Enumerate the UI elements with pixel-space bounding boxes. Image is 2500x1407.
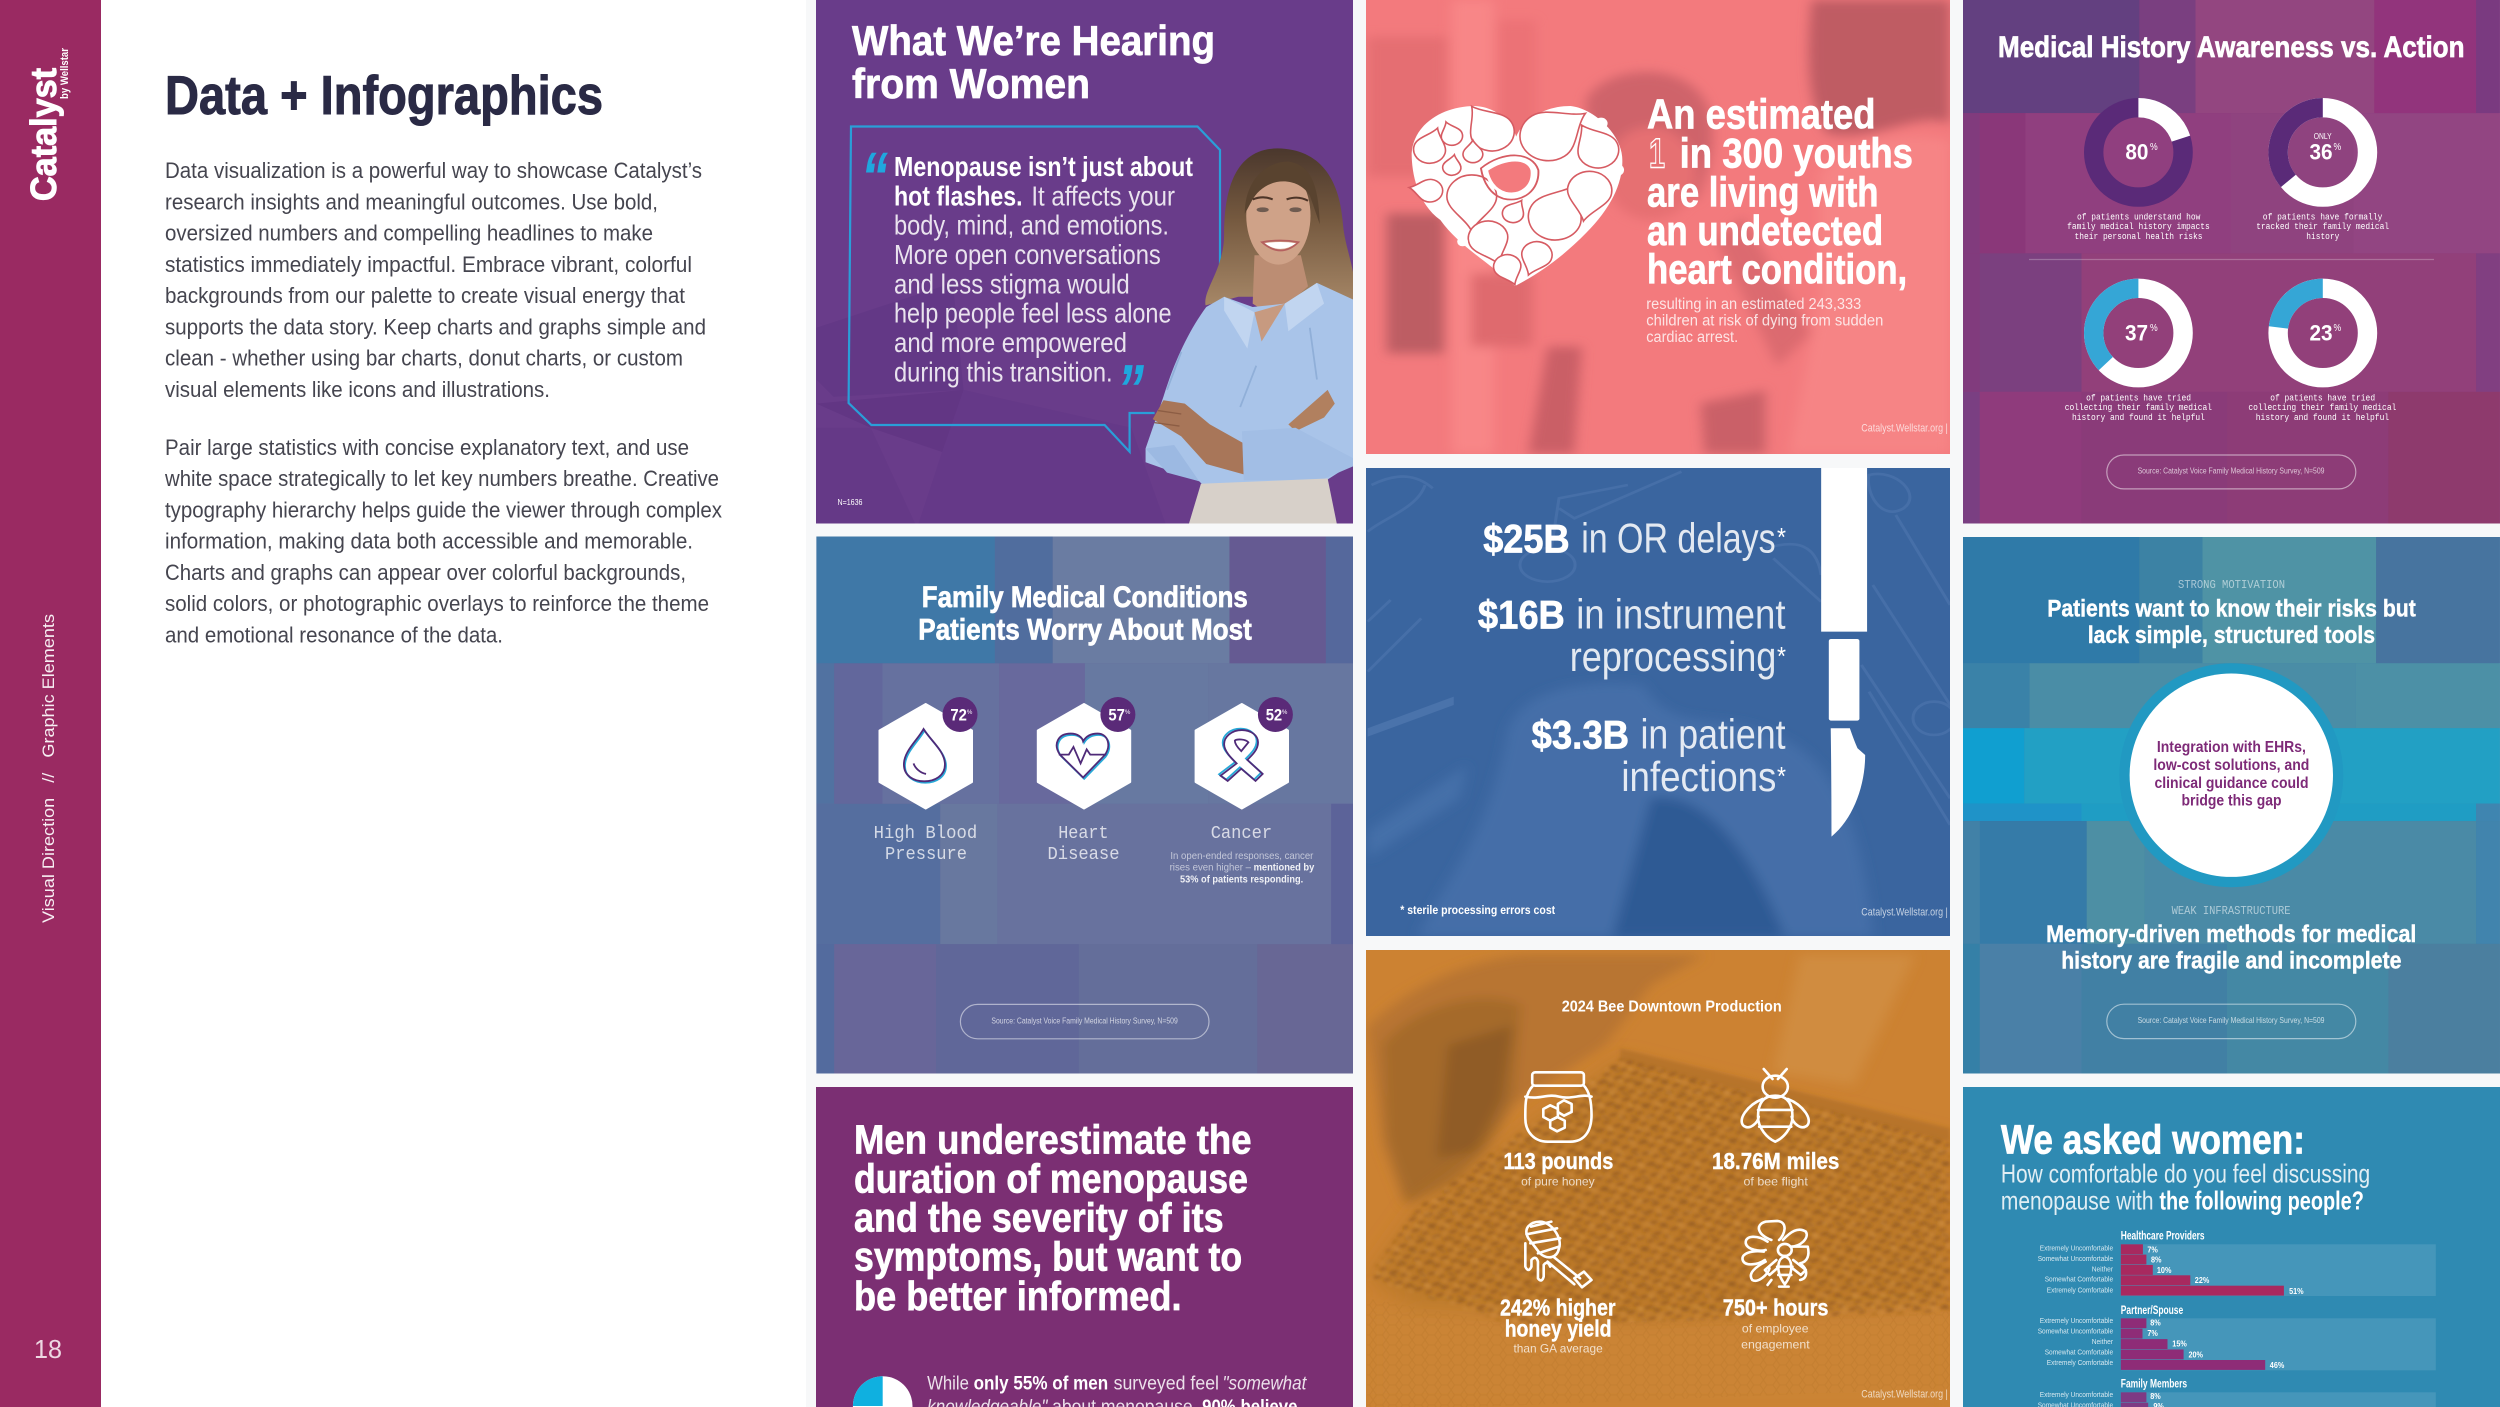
supporting text — [1646, 298, 1882, 342]
donut chart: 36%: % — [2334, 142, 2341, 153]
heading: 2024 Bee Downtown Production — [1562, 999, 1782, 1016]
icon: water drop — [904, 729, 946, 783]
donut chart: 37% — [2065, 288, 2212, 423]
source pill: Source: Catalyst Voice Family Medical History Survey, N=509 — [991, 1017, 1178, 1026]
bar chart: family members — [2038, 1379, 2436, 1407]
bottom message: Memory-driven methods for medical — [2046, 921, 2416, 948]
question text: How comfortable do you feel discussing — [2001, 1159, 2370, 1189]
bar chart: partner or spouse: Neither — [2092, 1337, 2114, 1346]
bottom message: history are fragile and incomplete — [2061, 947, 2401, 974]
icon: closing quote mark: ” — [1117, 350, 1144, 428]
bar chart: family members: Extremely Uncomfortable — [2040, 1390, 2113, 1399]
stat: heart disease: % — [1125, 710, 1131, 716]
donut chart: 80%: family medical history impacts — [2067, 222, 2210, 232]
footer: Catalyst.Wellstar.org | 5 — [1861, 1389, 1955, 1401]
icon: heart of teardrops — [1407, 93, 1626, 289]
question text — [2001, 1159, 2370, 1215]
section label: Visual Direction // Graphic Elements — [39, 614, 58, 923]
bar chart: partner or spouse: Somewhat Uncomfortable — [2038, 1326, 2113, 1335]
headline: an undetected — [1647, 207, 1883, 254]
donut chart: 37%: of patients have tried — [2086, 393, 2191, 403]
text block: second paragraph: white space strategically to let key numbers breathe. Creative — [164, 466, 719, 491]
top message: Patients want to know their risks but — [2047, 596, 2416, 623]
panel: bee downtown production — [1366, 950, 1955, 1407]
central callout circle: clinical guidance could — [2154, 775, 2308, 792]
stat: heart disease — [1038, 697, 1135, 865]
headline: be better informed. — [854, 1273, 1182, 1319]
stat: employee engagement: engagement — [1741, 1338, 1810, 1352]
footer: Catalyst.Wellstar.org | 5 — [1861, 907, 1955, 919]
supporting text: cardiac arrest. — [1646, 329, 1738, 346]
donut chart: 23%: history and found it helpful — [2256, 413, 2389, 423]
icon: honey dipper — [1525, 1222, 1592, 1287]
stat: cancer: In open-ended responses, cancer — [1170, 850, 1314, 862]
donut chart: 23% — [2248, 288, 2396, 423]
donut chart: 36%: 36 — [2310, 140, 2333, 164]
quote text: Menopause isn’t just about — [894, 151, 1193, 182]
text block: intro paragraph: statistics immediately impactful. Embrace vibrant, colorful — [165, 252, 692, 277]
quote text: hot flashes. — [894, 180, 1023, 211]
sidebar — [0, 0, 101, 1407]
explanatory text: only 55% of men — [974, 1372, 1108, 1394]
sample size note: N=1636 — [838, 497, 863, 507]
bar chart: partner or spouse — [2038, 1305, 2436, 1370]
donut chart: 37%: history and found it helpful — [2072, 413, 2205, 423]
text block: second paragraph: solid colors, or photographic overlays to reinforce the theme — [165, 591, 709, 616]
donut chart: 23%: % — [2334, 323, 2341, 334]
text block: second paragraph: information, making data both accessible and memorable. — [165, 529, 693, 554]
bar chart: partner or spouse: Extremely Uncomfortable — [2040, 1316, 2113, 1325]
cost statistics: $16B — [1478, 593, 1565, 637]
bar chart: healthcare providers: 22% — [2195, 1275, 2210, 1285]
bar chart: healthcare providers: Somewhat Uncomfortable — [2038, 1254, 2113, 1263]
panel: what we're hearing from women — [816, 0, 1356, 528]
bar chart: partner or spouse: Partner/Spouse — [2121, 1305, 2183, 1317]
supporting text: resulting in an estimated 243,333 — [1646, 296, 1861, 313]
stat: high blood pressure: High Blood — [874, 824, 977, 844]
panel: motivation vs infrastructure — [1963, 537, 2500, 1074]
bar chart: healthcare providers: Extremely Comfortable — [2047, 1285, 2113, 1294]
donut chart: 36%: of patients have formally — [2263, 213, 2383, 223]
text block: intro paragraph — [165, 158, 706, 402]
heading — [918, 581, 1252, 646]
quote text: More open conversations — [894, 239, 1161, 270]
stat: heart disease: Heart — [1058, 824, 1109, 844]
cost statistics: in OR delays — [1581, 514, 1776, 561]
icon: flower and bee — [1742, 1221, 1808, 1287]
donut chart: 36%: tracked their family medical — [2256, 222, 2389, 232]
stat: cancer — [1170, 697, 1314, 885]
donut chart: 36%: ONLY — [2314, 132, 2332, 141]
stat: high blood pressure — [874, 697, 978, 865]
stat: honey: 113 pounds — [1504, 1148, 1613, 1174]
headline: 1 — [1649, 130, 1665, 177]
page number: 18 — [34, 1334, 62, 1364]
quote text: and more empowered — [894, 327, 1127, 358]
panel: men underestimate menopause — [816, 1087, 1353, 1407]
donut chart: 23%: 23 — [2310, 320, 2333, 346]
panel: family medical conditions — [816, 536, 1353, 1074]
text block: second paragraph: and emotional resonance of the data. — [165, 622, 503, 648]
cost statistics: $25B — [1483, 517, 1570, 561]
headline — [1647, 90, 1913, 292]
bar chart: partner or spouse: 15% — [2172, 1339, 2187, 1349]
bar chart: partner or spouse: Extremely Comfortable — [2047, 1358, 2113, 1367]
headline: duration of menopause — [854, 1155, 1248, 1201]
illustration: woman with crossed arms — [1146, 148, 1356, 528]
stat: honey yield — [1500, 1222, 1616, 1355]
headline: are living with — [1647, 169, 1878, 216]
text block: intro paragraph: research insights and meaningful outcomes. Use bold, — [165, 189, 658, 214]
logo: Catalyst by Wellstar: by Wellstar — [59, 47, 71, 99]
text block: intro paragraph: supports the data story. Keep charts and graphs simple and — [165, 314, 706, 339]
footer: Catalyst.Wellstar.org | 2 — [1861, 423, 1955, 435]
explanatory text — [927, 1372, 1308, 1407]
source pill — [960, 1004, 1209, 1039]
stat: honey — [1504, 1072, 1613, 1189]
source pill — [2107, 1004, 2356, 1039]
bar chart: family members: Family Members — [2121, 1379, 2187, 1391]
icon: honey jar — [1525, 1072, 1592, 1142]
icon: heart with pulse — [1057, 734, 1109, 779]
top message — [2047, 578, 2416, 649]
icon: opening quote mark: “ — [861, 138, 888, 216]
panel: undetected heart condition — [1366, 0, 1955, 454]
pie chart — [853, 1376, 912, 1407]
quote text — [894, 151, 1193, 387]
stat: bee flight — [1712, 1069, 1839, 1189]
panel: we asked women — [1963, 1087, 2500, 1407]
stat: cancer: rises even higher – — [1170, 862, 1251, 874]
bar chart: partner or spouse: 8% — [2150, 1318, 2161, 1328]
stat: cancer: Cancer — [1211, 824, 1272, 844]
bar chart: healthcare providers — [2038, 1230, 2436, 1296]
bar chart: healthcare providers: 10% — [2157, 1265, 2172, 1275]
explanatory text: surveyed feel — [1114, 1372, 1219, 1394]
text block: intro paragraph: backgrounds from our palette to create visual energy that — [165, 283, 685, 308]
central callout circle: bridge this gap — [2182, 793, 2282, 810]
text block: intro paragraph: Data visualization is a powerful way to showcase Catalyst’s — [165, 158, 702, 183]
stat: high blood pressure: 72 — [950, 706, 967, 724]
heading — [852, 24, 1213, 99]
icon: bee — [1742, 1069, 1809, 1142]
panel: medical history awareness vs action — [1963, 0, 2500, 524]
donut chart: 80% — [2067, 108, 2210, 242]
bar chart: healthcare providers: Extremely Uncomfortable — [2040, 1244, 2113, 1253]
top message: lack simple, structured tools — [2088, 622, 2375, 649]
bar chart: healthcare providers: 8% — [2151, 1255, 2162, 1265]
bar chart: partner or spouse: Somewhat Comfortable — [2045, 1347, 2113, 1356]
stat: honey yield: 242% higher — [1500, 1295, 1616, 1321]
donut chart: 80%: % — [2150, 142, 2158, 153]
cost statistics: * — [1777, 641, 1786, 671]
stat: high blood pressure: Pressure — [885, 845, 967, 865]
headline — [854, 1116, 1252, 1319]
headline: and the severity of its — [854, 1195, 1224, 1241]
stat: cancer: % — [1282, 710, 1288, 716]
stat: honey yield: than GA average — [1514, 1341, 1603, 1355]
text block: second paragraph — [164, 435, 722, 648]
donut chart: 37%: collecting their family medical — [2065, 403, 2212, 413]
donut chart: 80%: 80 — [2125, 140, 2148, 164]
explanatory text: "somewhat — [1222, 1372, 1308, 1394]
central callout circle — [2119, 663, 2343, 887]
bar chart: partner or spouse: 7% — [2147, 1328, 2158, 1338]
bar chart: healthcare providers: 51% — [2289, 1286, 2304, 1296]
headline: heart condition, — [1647, 245, 1907, 292]
cost statistics: infections — [1621, 753, 1776, 800]
heading: What We’re Hearing — [852, 17, 1215, 64]
donut chart: 37%: 37 — [2125, 320, 2148, 346]
donut chart: 37%: % — [2150, 323, 2158, 334]
quote text: during this transition. — [894, 356, 1113, 387]
bar chart: healthcare providers: Healthcare Providers — [2121, 1230, 2205, 1242]
icon: scalpel — [1821, 465, 1867, 837]
stat: cancer: 52 — [1266, 706, 1282, 724]
heading: We asked women: — [2001, 1116, 2305, 1162]
text block: second paragraph: Charts and graphs can appear over colorful backgrounds, — [165, 560, 686, 585]
bar chart: healthcare providers: Neither — [2092, 1264, 2114, 1273]
bar chart: healthcare providers: Somewhat Comfortable — [2045, 1275, 2113, 1284]
cost statistics: $3.3B — [1532, 713, 1629, 757]
source pill: Source: Catalyst Voice Family Medical History Survey, N=509 — [2138, 1016, 2325, 1025]
gutter behind panels — [806, 0, 2500, 1407]
heading: from Women — [852, 60, 1090, 107]
headline: in 300 youths — [1680, 130, 1913, 177]
bar chart: partner or spouse: 20% — [2188, 1349, 2203, 1359]
cost statistics: * — [1777, 761, 1786, 791]
bar chart: partner or spouse: 46% — [2270, 1360, 2285, 1370]
cost statistics: in instrument — [1576, 590, 1786, 637]
speech bubble outline — [849, 126, 1220, 452]
footnote: * sterile processing errors cost — [1400, 903, 1555, 917]
supporting text: children at risk of dying from sudden — [1646, 313, 1883, 330]
stat: honey yield: honey yield — [1505, 1316, 1612, 1342]
question text: the following people? — [2159, 1185, 2364, 1215]
central callout circle: Integration with EHRs, — [2157, 739, 2306, 756]
donut chart: 23%: collecting their family medical — [2248, 403, 2396, 413]
explanatory text: While — [927, 1372, 969, 1394]
stat: cancer: 53% of patients responding. — [1180, 873, 1303, 885]
stat: bee flight: 18.76M miles — [1712, 1148, 1839, 1174]
cost statistics: in patient — [1640, 710, 1786, 757]
donut chart: 36% — [2256, 108, 2389, 242]
cost statistics — [1478, 514, 1786, 800]
quote text: body, mind, and emotions. — [894, 210, 1169, 241]
bottom message — [2046, 904, 2416, 974]
text block: intro paragraph: clean - whether using bar charts, donut charts, or custom — [165, 346, 683, 370]
bottom message: WEAK INFRASTRUCTURE — [2172, 904, 2290, 918]
stat: honey: of pure honey — [1521, 1175, 1595, 1189]
headline: Men underestimate the — [854, 1116, 1252, 1162]
top message: STRONG MOTIVATION — [2178, 578, 2285, 592]
stat: employee engagement: 750+ hours — [1723, 1295, 1828, 1321]
headline: An estimated — [1647, 90, 1876, 137]
heading: Family Medical Conditions — [922, 581, 1248, 614]
heading: Data + Infographics: Data + Infographics — [165, 64, 603, 126]
stat: cancer: mentioned by — [1254, 862, 1314, 874]
stat: employee engagement — [1723, 1221, 1828, 1352]
stat: heart disease: Disease — [1048, 845, 1120, 865]
logo: Catalyst by Wellstar: Catalyst — [23, 68, 64, 201]
donut chart: 80%: of patients understand how — [2077, 213, 2201, 223]
cost statistics: reprocessing — [1570, 633, 1776, 680]
text block: intro paragraph: visual elements like icons and illustrations. — [165, 377, 550, 402]
bar chart: healthcare providers: 7% — [2147, 1244, 2158, 1254]
text block: second paragraph: typography hierarchy helps guide the viewer through complex — [165, 498, 722, 522]
source pill — [2107, 455, 2356, 489]
panel: sterile processing costs — [1366, 465, 1955, 937]
central callout circle: low-cost solutions, and — [2153, 757, 2309, 774]
text block: intro paragraph: oversized numbers and compelling headlines to make — [165, 220, 653, 246]
question text: menopause with — [2001, 1185, 2154, 1215]
icon: awareness ribbon — [1219, 729, 1263, 781]
quote text: and less stigma would — [894, 268, 1130, 299]
quote text: It affects your — [1031, 180, 1175, 211]
stat: employee engagement: of employee — [1742, 1321, 1809, 1335]
heading: Patients Worry About Most — [918, 614, 1252, 646]
donut chart: 23%: of patients have tried — [2270, 393, 2375, 403]
donut chart: 80%: their personal health risks — [2074, 232, 2202, 242]
donut chart: 36%: history — [2306, 232, 2340, 242]
headline: symptoms, but want to — [854, 1234, 1242, 1280]
stat: heart disease: 57 — [1108, 706, 1125, 724]
bar chart: family members: 8% — [2150, 1391, 2161, 1401]
stat: bee flight: of bee flight — [1744, 1175, 1808, 1189]
stat: high blood pressure: % — [967, 710, 973, 716]
quote text: help people feel less alone — [894, 298, 1172, 329]
source pill: Source: Catalyst Voice Family Medical History Survey, N=509 — [2138, 467, 2325, 476]
text block: second paragraph: Pair large statistics with concise explanatory text, and use — [165, 435, 689, 460]
cost statistics: * — [1777, 522, 1786, 552]
